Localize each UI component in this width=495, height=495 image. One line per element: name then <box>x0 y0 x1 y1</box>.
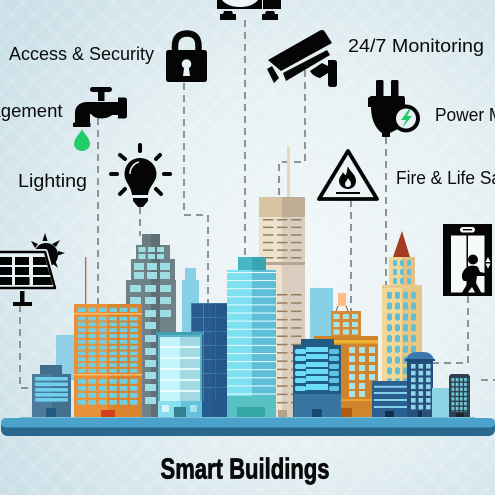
dashed connector lines <box>20 20 495 388</box>
icon: solar panel with sun <box>0 233 65 306</box>
icon: light bulb <box>111 145 170 207</box>
building: blue glass block <box>293 339 341 418</box>
icon: elevator <box>443 224 492 296</box>
icon: green water drop <box>74 129 90 151</box>
building: pale blue with cap <box>156 332 204 418</box>
building: cyan glass tower <box>227 257 276 418</box>
icon: padlock <box>166 34 207 82</box>
label: lighting: Lighting <box>18 171 87 191</box>
building: orange complex <box>314 293 379 418</box>
building: grey tiered tower <box>126 234 176 417</box>
building: yellow clock tower with red spire <box>382 231 422 385</box>
icon: fire warning triangle <box>319 151 377 199</box>
icon: monitor <box>217 0 281 20</box>
building: dark blue grid <box>191 303 228 418</box>
label: access and security: Access & Security <box>9 44 154 64</box>
building: back light blue right <box>432 388 450 418</box>
building: orange grid tower with antenna <box>74 257 142 418</box>
title: Smart Buildings <box>160 454 330 486</box>
building: small slate block <box>32 365 71 418</box>
skyline <box>32 147 470 418</box>
icon: security camera <box>267 30 337 87</box>
label: 24/7 monitoring: 24/7 Monitoring <box>348 35 484 56</box>
platform base <box>1 417 495 436</box>
building: blue low block and dome tower <box>372 352 435 418</box>
icon: power plug <box>368 80 420 137</box>
icon: water tap <box>73 87 127 127</box>
building: beige tall tower <box>259 147 305 418</box>
building: back light blue centre <box>310 288 333 340</box>
building: back light blue left <box>56 335 74 380</box>
building: small dark tower <box>449 374 470 418</box>
building: light blue spire <box>182 268 199 332</box>
